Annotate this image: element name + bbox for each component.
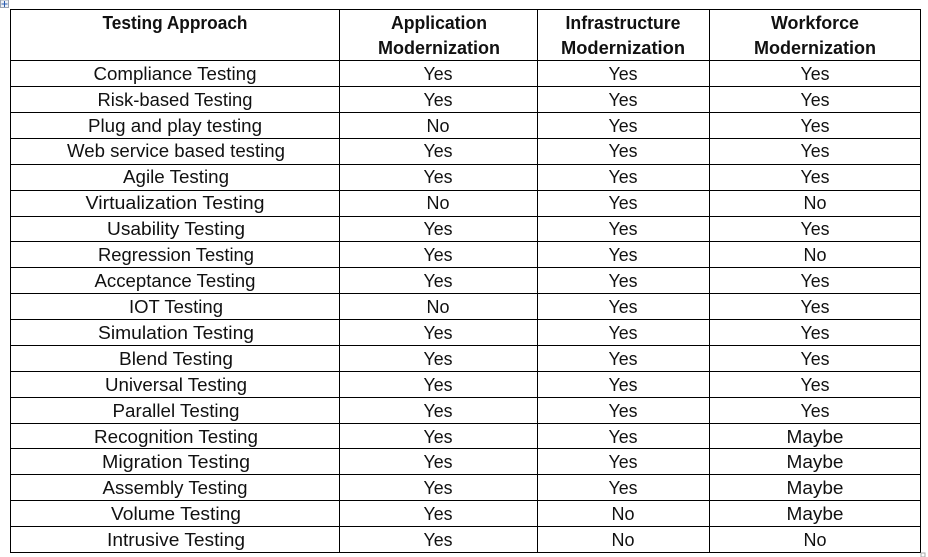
row: Universal Testing: Yes bbox=[424, 375, 452, 395]
row: Migration Testing: Yes bbox=[424, 452, 452, 472]
row: Agile Testing: Yes bbox=[608, 167, 638, 187]
row: Blend Testing: Blend Testing bbox=[119, 349, 233, 369]
row: Compliance Testing: Yes bbox=[424, 64, 452, 84]
row: Web service based testing bbox=[67, 141, 830, 161]
row: Agile Testing bbox=[123, 167, 830, 187]
row: Compliance Testing: Yes bbox=[608, 64, 638, 84]
row: Parallel Testing: Yes bbox=[800, 401, 830, 421]
row: Assembly Testing: Assembly Testing bbox=[102, 478, 248, 498]
row: Risk-based Testing bbox=[98, 90, 830, 110]
row: Acceptance Testing: Yes bbox=[800, 271, 830, 291]
row: Migration Testing: Maybe bbox=[786, 452, 844, 472]
row: IOT Testing: Yes bbox=[800, 297, 830, 317]
row: Simulation Testing: Simulation Testing bbox=[98, 323, 254, 343]
row: Assembly Testing: Yes bbox=[608, 478, 638, 498]
row: Usability Testing: Usability Testing bbox=[107, 219, 245, 239]
row: IOT Testing: No bbox=[426, 297, 450, 317]
row: Simulation Testing: Yes bbox=[608, 323, 638, 343]
row: Intrusive Testing: No bbox=[804, 530, 826, 550]
row: Agile Testing: Agile Testing bbox=[123, 167, 229, 187]
row: IOT Testing bbox=[129, 297, 830, 317]
row: Plug and play testing: No bbox=[426, 116, 450, 136]
row: Web service based testing: Yes bbox=[800, 141, 830, 161]
table header: Testing Approach bbox=[102, 13, 248, 33]
row: Intrusive Testing: Yes bbox=[424, 530, 452, 550]
row: Plug and play testing: Yes bbox=[608, 116, 638, 136]
row: Recognition Testing bbox=[94, 427, 844, 447]
table header: Workforce bbox=[771, 13, 859, 33]
row: Regression Testing: No bbox=[804, 245, 826, 265]
row: Acceptance Testing: Yes bbox=[424, 271, 452, 291]
row: Assembly Testing bbox=[102, 478, 844, 498]
row: Volume Testing: Volume Testing bbox=[111, 504, 241, 524]
row: Intrusive Testing: No bbox=[612, 530, 634, 550]
row: Universal Testing: Universal Testing bbox=[105, 375, 247, 395]
row: Usability Testing: Yes bbox=[424, 219, 452, 239]
row: Blend Testing: Yes bbox=[608, 349, 638, 369]
row: Migration Testing: Migration Testing bbox=[102, 452, 250, 472]
row: Plug and play testing: Yes bbox=[800, 116, 830, 136]
row: Regression Testing: Yes bbox=[608, 245, 638, 265]
row: Virtualization Testing: No bbox=[426, 193, 450, 213]
row: Web service based testing: Yes bbox=[608, 141, 638, 161]
row: Compliance Testing: Yes bbox=[800, 64, 830, 84]
row: Intrusive Testing bbox=[107, 530, 826, 550]
row: Universal Testing: Yes bbox=[608, 375, 638, 395]
row: Recognition Testing: Yes bbox=[608, 427, 638, 447]
table header: Modernization bbox=[754, 38, 876, 58]
row: Agile Testing: Yes bbox=[800, 167, 830, 187]
row: Virtualization Testing: Virtualization Testing bbox=[86, 193, 264, 213]
row: Virtualization Testing: No bbox=[804, 193, 826, 213]
row: Blend Testing: Yes bbox=[800, 349, 830, 369]
row: Parallel Testing bbox=[112, 401, 830, 421]
row: Migration Testing bbox=[102, 452, 844, 472]
row: Regression Testing: Yes bbox=[424, 245, 452, 265]
table header: Modernization bbox=[561, 38, 685, 58]
row: Intrusive Testing: Intrusive Testing bbox=[107, 530, 245, 550]
row: Regression Testing: Regression Testing bbox=[98, 245, 254, 265]
row: Usability Testing: Yes bbox=[608, 219, 638, 239]
icon: table resize handle bbox=[921, 553, 925, 557]
row: Acceptance Testing bbox=[94, 271, 830, 291]
row: Risk-based Testing: Yes bbox=[800, 90, 830, 110]
row: Blend Testing bbox=[119, 349, 830, 369]
row: Risk-based Testing: Risk-based Testing bbox=[98, 90, 252, 110]
row: Compliance Testing: Compliance Testing bbox=[94, 64, 256, 84]
row: Web service based testing: Web service based testing bbox=[67, 141, 285, 161]
row: Agile Testing: Yes bbox=[424, 167, 452, 187]
row: Volume Testing: Yes bbox=[424, 504, 452, 524]
row: Recognition Testing: Maybe bbox=[786, 427, 844, 447]
row: Recognition Testing: Recognition Testing bbox=[94, 427, 258, 447]
row: Plug and play testing: Plug and play testing bbox=[88, 116, 262, 136]
row: Volume Testing: Maybe bbox=[786, 504, 844, 524]
row: Parallel Testing: Yes bbox=[424, 401, 452, 421]
row: Simulation Testing: Yes bbox=[800, 323, 830, 343]
row: Risk-based Testing: Yes bbox=[424, 90, 452, 110]
row: Assembly Testing: Yes bbox=[424, 478, 452, 498]
row: Regression Testing bbox=[98, 245, 826, 265]
row: Universal Testing: Yes bbox=[800, 375, 830, 395]
table header: Application bbox=[391, 13, 487, 33]
row: IOT Testing: Yes bbox=[608, 297, 638, 317]
row: Parallel Testing: Parallel Testing bbox=[112, 401, 240, 421]
row: Recognition Testing: Yes bbox=[424, 427, 452, 447]
row: Usability Testing bbox=[107, 219, 830, 239]
row: Simulation Testing bbox=[98, 323, 830, 343]
row: Compliance Testing bbox=[94, 64, 830, 84]
row: Simulation Testing: Yes bbox=[424, 323, 452, 343]
row: Virtualization Testing bbox=[86, 193, 826, 213]
row: Acceptance Testing: Yes bbox=[608, 271, 638, 291]
row: Acceptance Testing: Acceptance Testing bbox=[94, 271, 256, 291]
table header bbox=[102, 13, 876, 58]
row: Volume Testing: No bbox=[612, 504, 634, 524]
row: Migration Testing: Yes bbox=[608, 452, 638, 472]
row: Web service based testing: Yes bbox=[424, 141, 452, 161]
row: Universal Testing bbox=[105, 375, 830, 395]
table header: Modernization bbox=[378, 38, 500, 58]
icon: table move handle bbox=[0, 0, 8, 8]
table header: Infrastructure bbox=[566, 13, 680, 33]
row: Assembly Testing: Maybe bbox=[786, 478, 844, 498]
row: Parallel Testing: Yes bbox=[608, 401, 638, 421]
row: Plug and play testing bbox=[88, 116, 830, 136]
row: Usability Testing: Yes bbox=[800, 219, 830, 239]
row: Blend Testing: Yes bbox=[424, 349, 452, 369]
row: Risk-based Testing: Yes bbox=[608, 90, 638, 110]
row: Virtualization Testing: Yes bbox=[608, 193, 638, 213]
row: Volume Testing bbox=[111, 504, 844, 524]
row: IOT Testing: IOT Testing bbox=[129, 297, 223, 317]
